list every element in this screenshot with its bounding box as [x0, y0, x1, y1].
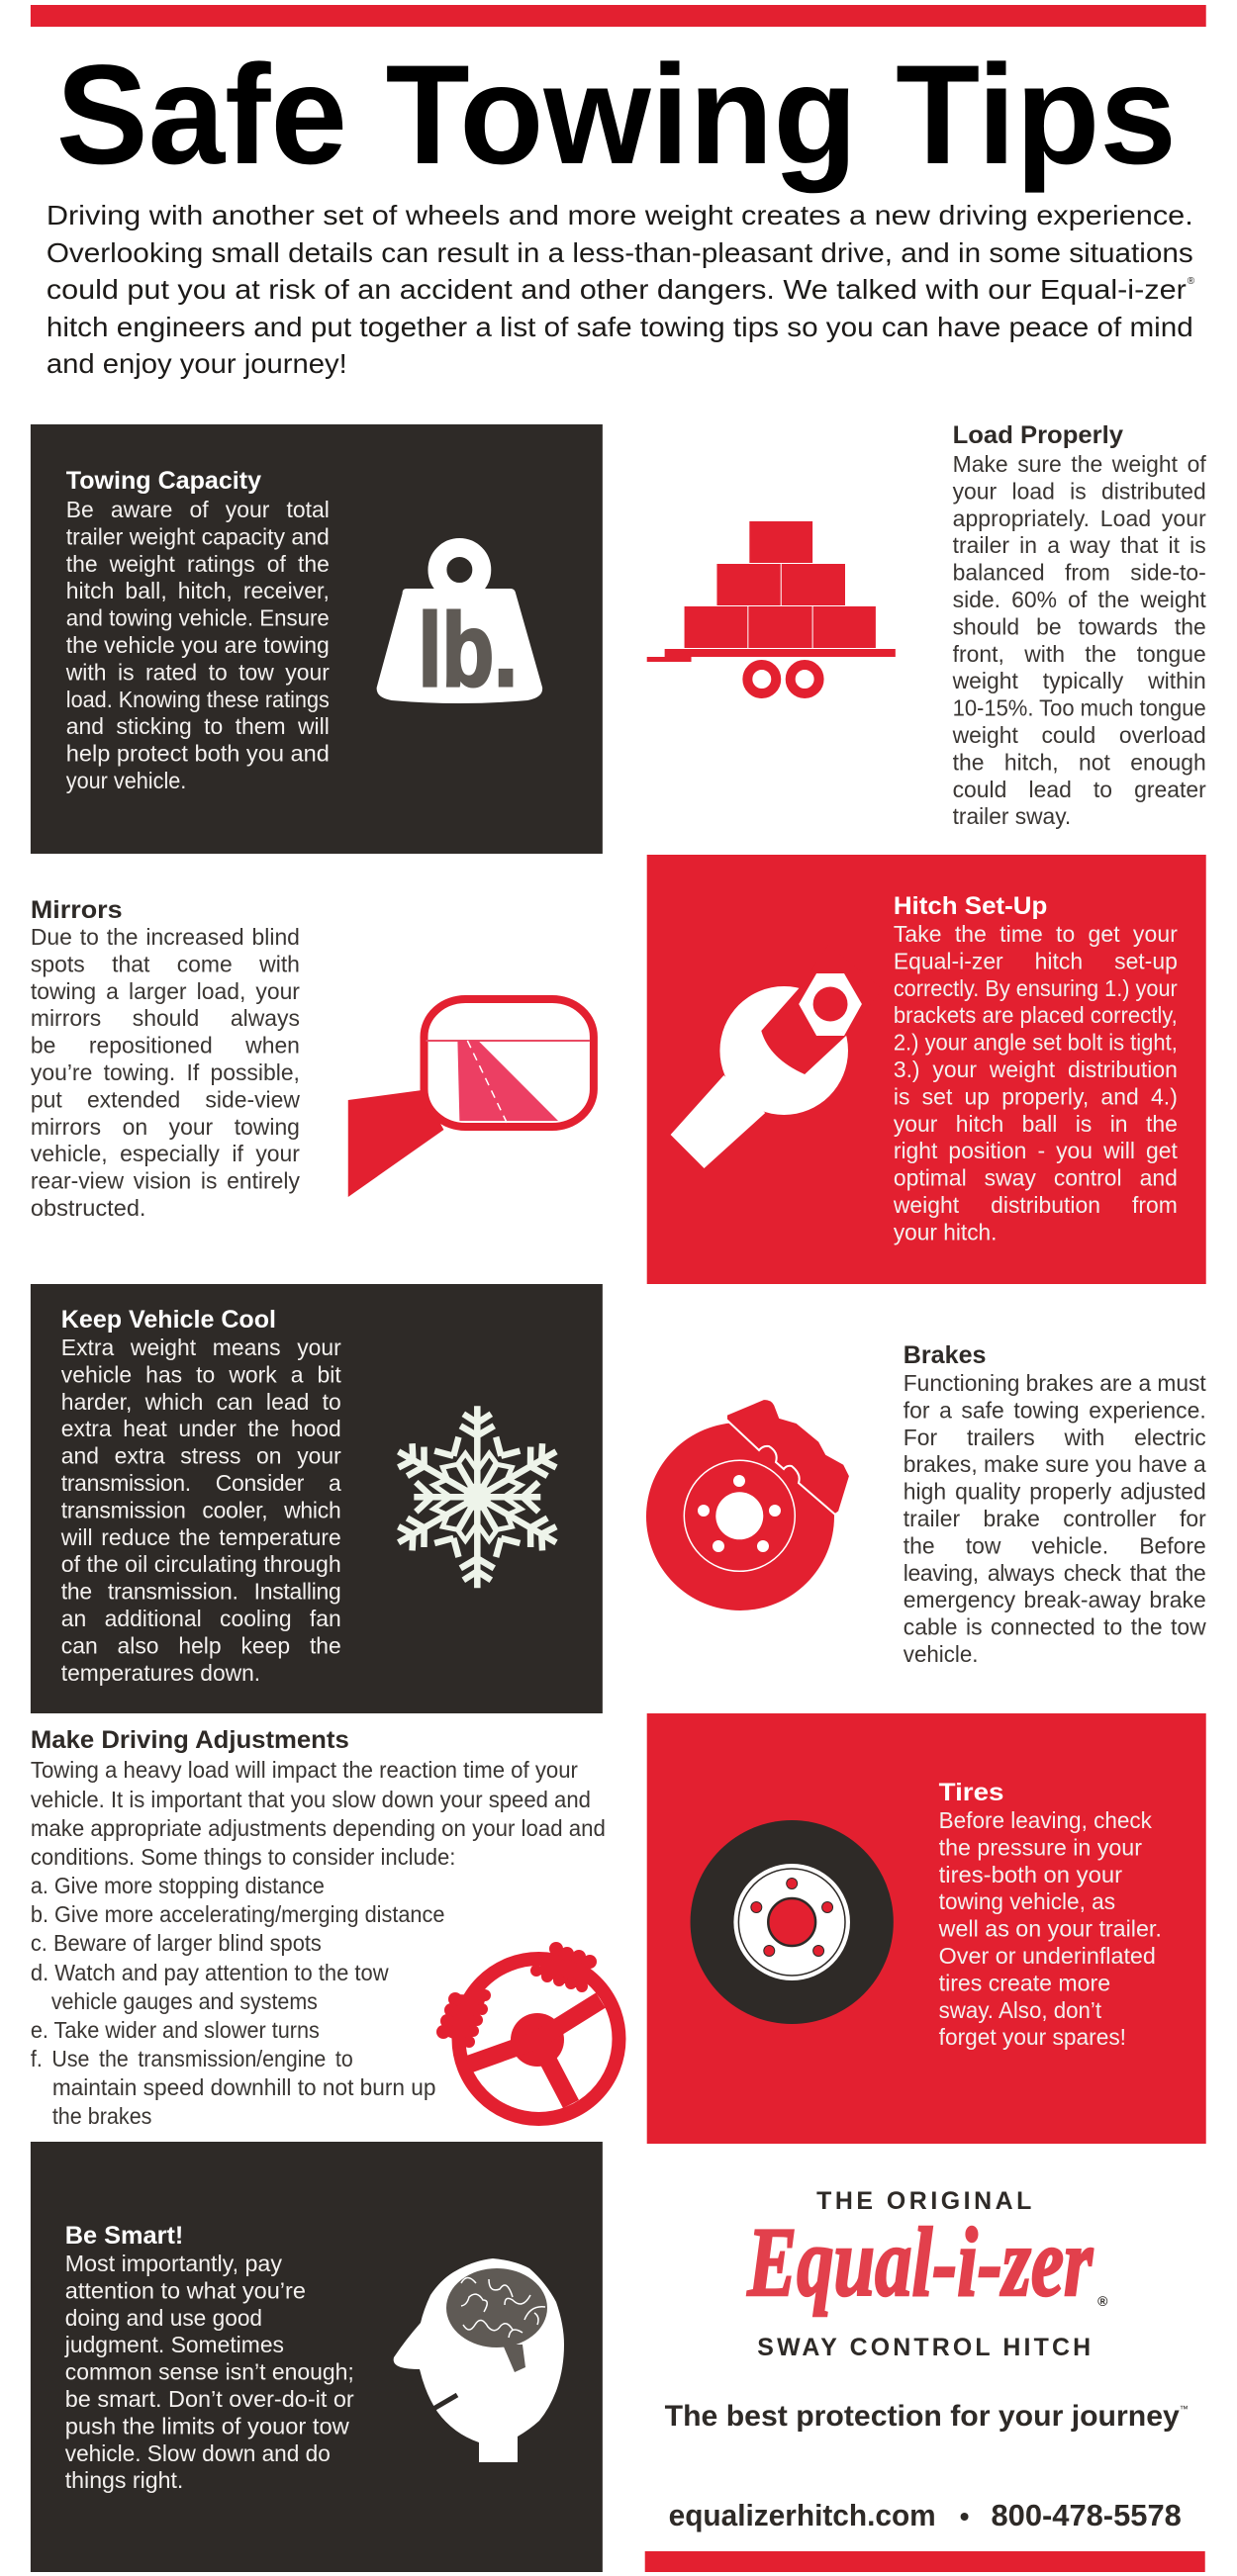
heading: mirrors: Mirrors — [31, 896, 123, 924]
text: tires body: tires create more — [939, 1970, 1110, 1995]
icon: weight: lb. — [419, 593, 518, 708]
panel: keep vehicle cool — [31, 1284, 603, 1713]
text: load properly body: weight typically within — [952, 668, 1206, 693]
text: tires body: well as on your trailer. — [938, 1916, 1162, 1942]
logo: the original equal-i-zer sway control hitch: ® — [1097, 2293, 1108, 2309]
icon: head with brain — [394, 2258, 564, 2462]
text: towing capacity body: Be aware of your total — [66, 497, 330, 522]
text: load properly body: the hitch, not enough — [953, 749, 1206, 775]
text: keep vehicle cool body: extra heat under the hood — [61, 1416, 341, 1441]
text: driving adjustments body: conditions. Some things to consider include: — [31, 1844, 455, 1870]
text: load properly body: balanced from side-to- — [953, 560, 1206, 586]
text: driving adjustments body: maintain speed downhill to not burn up — [52, 2074, 435, 2100]
heading: hitch set-up: Hitch Set-Up — [894, 892, 1047, 920]
contact line — [669, 2498, 1182, 2532]
text: mirrors body: you’re towing. If possible, — [31, 1059, 300, 1085]
text: towing capacity body: with is rated to tow your — [65, 659, 330, 685]
intro paragraph: ® — [1188, 276, 1195, 287]
text: hitch set-up body: right position - you will get — [894, 1138, 1178, 1163]
text: hitch set-up body: 3.) your weight distribution — [894, 1057, 1178, 1082]
heading: make driving adjustments: Make Driving Adjustments — [31, 1726, 349, 1754]
text: keep vehicle cool body: vehicle has to work a bit — [61, 1361, 341, 1387]
text: mirrors body: mirrors should always — [31, 1005, 300, 1031]
text: keep vehicle cool body: of the oil circulating through — [61, 1551, 341, 1577]
text: be smart body: Most importantly, pay — [65, 2251, 283, 2276]
panel: make driving adjustments — [31, 1726, 618, 2129]
text: be smart body: attention to what you’re — [65, 2277, 306, 2303]
text: mirrors body: be repositioned when — [31, 1033, 300, 1058]
text: keep vehicle cool body: temperatures down. — [61, 1660, 260, 1686]
text: brakes body: emergency break-away brake — [904, 1587, 1206, 1612]
text: brakes body — [904, 1370, 1206, 1667]
text: hitch set-up body: 2.) your angle set bolt is tight, — [894, 1030, 1178, 1056]
text: driving adjustments body: vehicle gauges and systems — [51, 1988, 318, 2014]
logo: the original equal-i-zer sway control hitch: THE ORIGINAL — [816, 2187, 1031, 2215]
panel: tires — [647, 1713, 1206, 2144]
text: be smart body: vehicle. Slow down and do — [65, 2440, 331, 2466]
text: keep vehicle cool body: can also help keep the — [61, 1632, 341, 1658]
text: be smart body: be smart. Don’t over-do-it or — [65, 2386, 354, 2412]
text: load properly body: Make sure the weight of — [953, 451, 1206, 477]
panel: towing capacity — [31, 424, 603, 854]
text: keep vehicle cool body: harder, which can lead to — [61, 1389, 341, 1415]
text: keep vehicle cool body — [60, 1334, 341, 1686]
text: towing capacity body: trailer weight capacity and — [66, 523, 330, 549]
heading: be smart: Be Smart! — [65, 2222, 183, 2250]
text: driving adjustments body: f. Use the transmission/engine to — [31, 2046, 353, 2071]
logo: the original equal-i-zer sway control hitch — [747, 2187, 1108, 2361]
text: towing capacity body: and towing vehicle. Ensure — [66, 605, 330, 631]
heading: brakes: Brakes — [904, 1341, 987, 1369]
text: hitch set-up body: Take the time to get your — [894, 921, 1178, 947]
intro paragraph: Overlooking small details can result in a less-than-pleasant drive, and in some situations — [47, 237, 1193, 268]
title: Safe Towing Tips — [56, 37, 1177, 194]
intro paragraph — [47, 200, 1195, 379]
intro paragraph: could put you at risk of an accident and other dangers. We talked with our Equal-i-zer — [47, 274, 1187, 305]
text: keep vehicle cool body: transmission. Consider a — [61, 1470, 341, 1496]
text: load properly body: appropriately. Load your — [953, 506, 1206, 531]
text: mirrors body: vehicle, especially if your — [31, 1141, 300, 1166]
icon: wrench and nut — [671, 945, 883, 1168]
text: be smart body — [64, 2251, 354, 2493]
text: hitch set-up body: weight distribution from — [893, 1192, 1178, 1218]
text: driving adjustments body: d. Watch and pay attention to the tow — [31, 1960, 389, 1985]
text: mirrors body: Due to the increased blind — [31, 924, 300, 950]
text: keep vehicle cool body: will reduce the temperature — [60, 1524, 341, 1550]
intro paragraph: and enjoy your journey! — [47, 348, 347, 379]
text: load properly body: front, with the tongue — [953, 641, 1206, 667]
text: driving adjustments body: e. Take wider and slower turns — [31, 2017, 320, 2043]
text: towing capacity body: the vehicle you are towing — [66, 632, 330, 658]
text: towing capacity body: load. Knowing these ratings — [66, 687, 330, 712]
text: load properly body: trailer sway. — [953, 803, 1071, 829]
text: tires body: forget your spares! — [939, 2024, 1126, 2050]
logo: the original equal-i-zer sway control hitch: Equal-i-zer — [747, 2207, 1094, 2317]
text: driving adjustments body: a. Give more stopping distance — [31, 1873, 325, 1898]
text: tires body: Over or underinflated — [939, 1943, 1156, 1969]
text: load properly body — [952, 451, 1206, 829]
icon: loaded trailer — [647, 521, 896, 693]
top red bar — [31, 5, 1206, 27]
text: keep vehicle cool body: and extra stress on your — [61, 1443, 341, 1469]
text: keep vehicle cool body: the transmission. Installing — [61, 1579, 341, 1605]
heading: towing capacity: Towing Capacity — [66, 467, 261, 495]
text: brakes body: Functioning brakes are a must — [904, 1370, 1206, 1396]
icon: side mirror — [348, 999, 594, 1197]
text: brakes body: cable is connected to the tow — [904, 1614, 1206, 1640]
text: driving adjustments body: the brakes — [52, 2103, 151, 2129]
text: mirrors body: obstructed. — [31, 1195, 145, 1221]
text: tires body: towing vehicle, as — [939, 1888, 1115, 1914]
text: tires body: sway. Also, don’t — [939, 1997, 1102, 2023]
text: load properly body: your load is distributed — [953, 478, 1206, 504]
text: load properly body: could lead to greater — [953, 777, 1206, 802]
text: be smart body: things right. — [65, 2467, 183, 2493]
text: be smart body: judgment. Sometimes — [64, 2332, 284, 2357]
contact line: equalizerhitch.com — [669, 2498, 936, 2532]
text: mirrors body: rear-view vision is entirely — [31, 1168, 300, 1194]
text: tires body: tires-both on your — [939, 1862, 1122, 1887]
text: load properly body: side. 60% of the weight — [953, 587, 1206, 612]
intro paragraph: Driving with another set of wheels and more weight creates a new driving experience. — [47, 200, 1193, 230]
text: brakes body: brakes, make sure you have a — [904, 1451, 1206, 1477]
text: brakes body: high quality properly adjusted — [904, 1479, 1206, 1505]
text: be smart body: push the limits of youor tow — [65, 2413, 349, 2438]
text: towing capacity body: help protect both you and — [66, 741, 330, 767]
text: keep vehicle cool body: transmission cooler, which — [61, 1497, 341, 1522]
text: tires body: the pressure in your — [939, 1834, 1142, 1860]
text: brakes body: leaving, always check that the — [904, 1560, 1206, 1586]
text: brakes body: the tow vehicle. Before — [904, 1532, 1206, 1558]
tagline: ™ — [1180, 2404, 1189, 2414]
text: load properly body: should be towards the — [953, 613, 1206, 639]
text: hitch set-up body: is set up properly, and 4.) — [894, 1083, 1178, 1109]
text: be smart body: doing and use good — [65, 2305, 262, 2331]
text: hitch set-up body: brackets are placed correctly, — [894, 1002, 1178, 1028]
text: tires body — [938, 1807, 1162, 2050]
text: load properly body: 10-15%. Too much tongue — [953, 695, 1206, 721]
contact line: 800-478-5578 — [991, 2498, 1182, 2532]
text: tires body: Before leaving, check — [939, 1807, 1152, 1833]
text: mirrors body — [31, 924, 300, 1221]
text: driving adjustments body: make appropriate adjustments depending on your load and — [31, 1815, 606, 1841]
text: hitch set-up body — [893, 921, 1178, 1244]
icon: brake disc and caliper — [646, 1399, 850, 1610]
text: brakes body: For trailers with electric — [904, 1425, 1206, 1450]
text: hitch set-up body: optimal sway control and — [894, 1165, 1178, 1191]
text: driving adjustments body: b. Give more accelerating/merging distance — [31, 1901, 444, 1927]
text: load properly body: trailer in a way that it is — [953, 532, 1206, 558]
text: towing capacity body: hitch ball, hitch, receiver, — [66, 578, 330, 603]
panel: be smart — [31, 2142, 603, 2572]
text: driving adjustments body: c. Beware of larger blind spots — [31, 1930, 322, 1956]
text: mirrors body: towing a larger load, your — [31, 978, 300, 1004]
heading: load properly: Load Properly — [953, 421, 1123, 449]
heading: tires: Tires — [939, 1779, 1003, 1806]
text: brakes body: trailer brake controller for — [904, 1506, 1206, 1531]
text: brakes body: for a safe towing experience. — [904, 1397, 1206, 1423]
text: towing capacity body — [65, 497, 330, 793]
intro paragraph: hitch engineers and put together a list of safe towing tips so you can have peace of mind — [47, 312, 1193, 342]
icon: steering wheel with hands — [436, 1942, 618, 2119]
text: mirrors body: mirrors on your towing — [31, 1114, 300, 1140]
text: towing capacity body: your vehicle. — [66, 768, 186, 793]
text: be smart body: common sense isn’t enough; — [65, 2359, 354, 2385]
panel: mirrors — [31, 896, 594, 1221]
logo: the original equal-i-zer sway control hitch: SWAY CONTROL HITCH — [757, 2334, 1091, 2361]
icon: tire — [691, 1820, 894, 2024]
text: driving adjustments body — [31, 1757, 606, 2129]
text: brakes body: vehicle. — [904, 1641, 979, 1667]
text: hitch set-up body: Equal-i-zer hitch set-up — [894, 948, 1178, 973]
text: driving adjustments body: vehicle. It is important that you slow down your speed and — [31, 1787, 591, 1812]
panel: brakes — [646, 1341, 1206, 1667]
panel: hitch set-up — [647, 855, 1206, 1284]
tagline: The best protection for your journey — [665, 2400, 1180, 2433]
panel: load properly — [647, 421, 1206, 829]
text: towing capacity body: the weight ratings of the — [66, 551, 330, 577]
icon: weight — [377, 548, 542, 708]
text: mirrors body: spots that come with — [31, 951, 300, 976]
text: keep vehicle cool body: Extra weight means your — [61, 1334, 341, 1360]
heading: keep vehicle cool: Keep Vehicle Cool — [61, 1306, 276, 1334]
bottom red bar — [645, 2551, 1205, 2572]
text: hitch set-up body: correctly. By ensuring 1.) your — [894, 975, 1178, 1001]
text: hitch set-up body: your hitch ball is in the — [894, 1111, 1178, 1137]
text: keep vehicle cool body: an additional cooling fan — [61, 1606, 341, 1631]
text: load properly body: weight could overload — [952, 722, 1206, 748]
text: driving adjustments body: Towing a heavy load will impact the reaction time of your — [31, 1757, 578, 1783]
text: towing capacity body: and sticking to them will — [66, 713, 330, 739]
text: hitch set-up body: your hitch. — [894, 1219, 997, 1244]
text: mirrors body: put extended side-view — [31, 1086, 300, 1112]
icon: snowflake — [390, 1406, 564, 1588]
